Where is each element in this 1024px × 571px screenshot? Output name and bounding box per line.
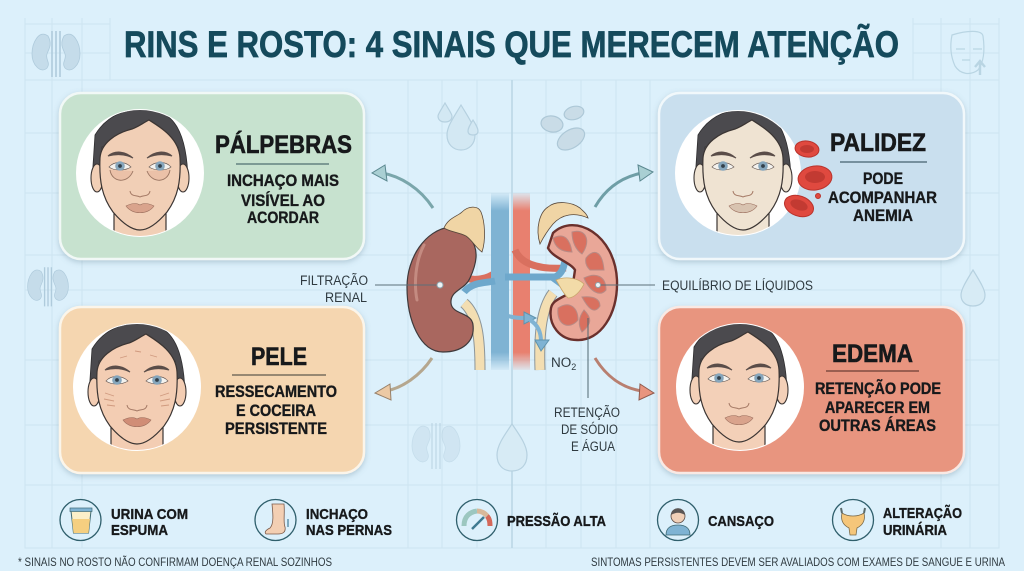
description: ANEMIA [853, 207, 913, 225]
left adrenal gland [444, 207, 485, 252]
icon: face with dry skin [73, 323, 201, 459]
label: filtração renal: RENAL [325, 290, 367, 305]
description [215, 383, 337, 438]
arrow: flow to NO2 [499, 310, 549, 351]
description: PERSISTENTE [225, 420, 327, 438]
label: filtração renal: FILTRAÇÃO [300, 273, 368, 288]
symptom: urina com espuma: URINA COM [111, 506, 188, 523]
vein [491, 193, 509, 370]
right kidney [548, 225, 617, 340]
label: retenção de sódio e água [554, 318, 620, 454]
right kidney pyramids [553, 231, 606, 332]
description [828, 170, 937, 225]
background icon: drop right [961, 270, 985, 306]
symptom: inchaço nas pernas: INCHAÇO [306, 506, 368, 523]
arrow: kidney to edema [595, 358, 654, 400]
right adrenal gland [538, 203, 588, 244]
left kidney [407, 227, 476, 352]
symptom: urina com espuma [60, 500, 188, 540]
background icon: face [951, 31, 985, 75]
icon: urine cup [60, 500, 101, 540]
background icon: blood cells [540, 104, 588, 155]
artery [513, 193, 530, 370]
heading: PALIDEZ [830, 129, 926, 157]
symptom: pressão alta: PRESSÃO ALTA [507, 512, 606, 530]
description: APARECER EM [825, 399, 930, 417]
background icon: kidneys top left [32, 31, 80, 77]
arrow: kidney to pele [375, 358, 432, 400]
label: filtração renal [300, 273, 443, 305]
kidney diagram [407, 193, 617, 372]
icon: swollen face [676, 321, 804, 457]
footnote left: * SINAIS NO ROSTO NÃO CONFIRMAM DOENÇA RENAL SOZINHOS [18, 555, 332, 569]
icon: red blood cells [781, 139, 834, 221]
background icon: water drops [438, 103, 478, 150]
background icon: drop bottom [497, 424, 527, 471]
icon: face with puffy eyelids [76, 109, 204, 245]
description [815, 378, 941, 435]
label: retenção de sódio e água: DE SÓDIO [561, 422, 618, 437]
background icon: kidneys bottom [412, 423, 460, 469]
label: NO2: 2 [571, 362, 576, 372]
heading: PÁLPEBRAS [215, 130, 352, 159]
icon: tired person [658, 500, 698, 540]
ureters [464, 293, 553, 370]
icon: bladder [832, 500, 874, 540]
label: retenção de sódio e água: E ÁGUA [571, 439, 615, 454]
description: RESSECAMENTO [215, 383, 337, 401]
heading: EDEMA [832, 340, 913, 368]
arrow: kidney to palidez [595, 165, 653, 207]
label: NO2: NO [551, 355, 571, 370]
panel: edema [659, 307, 964, 473]
description: PODE [863, 170, 903, 188]
icon: gauge [456, 500, 498, 540]
symptom: cansaço: CANSAÇO [708, 513, 774, 530]
description: ACOMPANHAR [828, 189, 937, 207]
label: equilíbrio de líquidos [596, 278, 813, 293]
symptom: inchaço nas pernas: NAS PERNAS [306, 522, 392, 539]
arrow: kidney to pálpebras [372, 165, 433, 208]
icon: pale face [675, 109, 801, 245]
label: equilíbrio de líquidos: EQUILÍBRIO DE LÍQUIDOS [662, 278, 813, 293]
symptom: inchaço nas pernas [255, 500, 392, 540]
heading: PELE [251, 343, 307, 371]
description: ACORDAR [247, 209, 319, 227]
title: RINS E ROSTO: 4 SINAIS QUE MERECEM ATENÇÃO [124, 23, 899, 65]
label: retenção de sódio e água: RETENÇÃO [554, 405, 620, 420]
description: E COCEIRA [236, 402, 316, 420]
panel: palidez [659, 93, 964, 259]
description: VISÍVEL AO [241, 191, 325, 210]
symptom: cansaço [658, 500, 774, 540]
symptom: alteração urinária [832, 500, 962, 540]
panel: pele [60, 307, 364, 473]
description: INCHAÇO MAIS [227, 172, 339, 190]
symptom: alteração urinária: ALTERAÇÃO [883, 504, 962, 522]
description [227, 172, 339, 227]
description: RETENÇÃO PODE [815, 378, 941, 398]
renal pelvis [556, 278, 584, 298]
icon: swollen leg [255, 500, 296, 540]
background icon: kidneys left [28, 267, 68, 306]
symptom: urina com espuma: ESPUMA [111, 522, 168, 539]
symptom: alteração urinária: URINÁRIA [883, 522, 947, 539]
description: OUTRAS ÁREAS [819, 416, 936, 435]
symptom: pressão alta [456, 500, 606, 540]
panel: pálpebras [60, 93, 364, 259]
